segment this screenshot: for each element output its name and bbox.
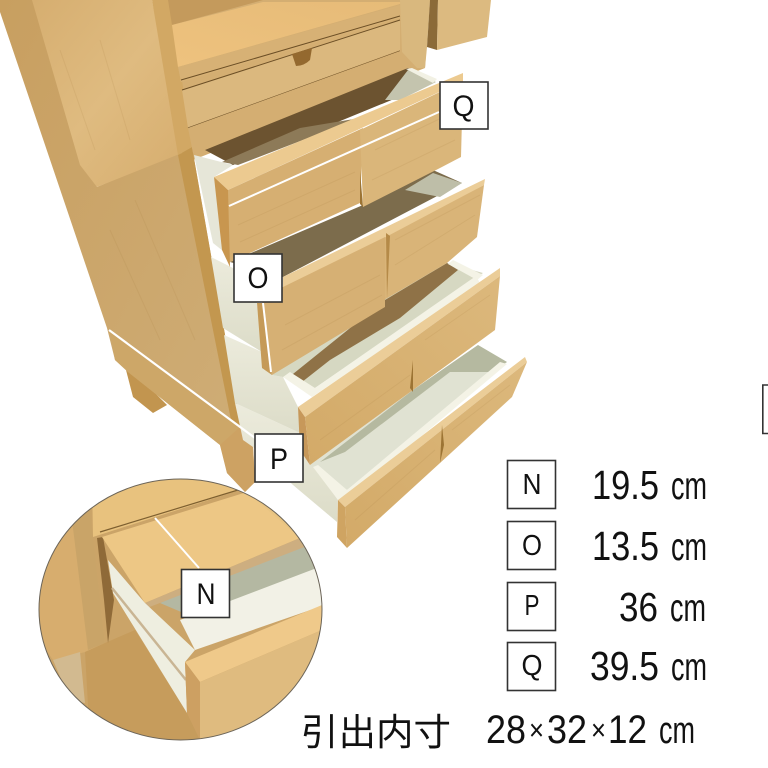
cropped box at right edge [763, 385, 768, 434]
small drawer [182, 20, 400, 128]
cabinet body [0, 0, 491, 492]
drawer: O [211, 170, 485, 375]
drawer: P [224, 260, 500, 465]
back leg [126, 370, 167, 413]
marker P: P [270, 443, 288, 476]
measurement line P [109, 330, 255, 438]
drawer inner dimensions: × [591, 714, 606, 747]
right front [384, 185, 484, 300]
drawer inner dimensions: × [529, 714, 544, 747]
centre split [440, 425, 444, 463]
white drawer side [108, 560, 195, 713]
dark gap [97, 537, 114, 643]
interior shadow [160, 547, 314, 612]
interior shadow [320, 345, 507, 462]
legend row N: cm [671, 465, 707, 508]
front leg [220, 427, 255, 492]
legend row Q: Q [522, 650, 542, 682]
legend row P: 36 [619, 584, 658, 630]
interior floor [180, 566, 322, 650]
split [386, 233, 390, 298]
side [194, 155, 233, 255]
interior [272, 263, 483, 390]
drawer: bottom [235, 345, 527, 548]
legend row P: P [524, 590, 540, 622]
white side groove [112, 588, 186, 680]
legend [508, 460, 707, 690]
left stile [40, 526, 94, 660]
front face [200, 630, 322, 740]
front top [283, 179, 485, 290]
legend row N: 19.5 [592, 462, 659, 508]
wood grain [60, 40, 510, 520]
interior back [385, 70, 436, 100]
back rim [448, 260, 483, 280]
drawer inner dimensions: 引出内寸 [301, 712, 451, 753]
measurement line O [263, 303, 271, 372]
front face [305, 276, 500, 465]
top plate [102, 492, 300, 603]
top plate edge [145, 538, 307, 608]
legend row P: cm [670, 587, 706, 630]
front end [337, 500, 347, 548]
interior [310, 345, 507, 490]
split [360, 170, 363, 207]
drawer inner dimensions: cm [659, 710, 695, 752]
marker N [182, 570, 230, 618]
legend row P [508, 582, 706, 630]
interior shadow [288, 263, 458, 382]
legend row Q [508, 642, 707, 690]
legend row O: O [522, 530, 542, 562]
marker Q [440, 82, 488, 129]
side [211, 257, 262, 352]
front top [338, 357, 527, 507]
top shelf [172, 2, 407, 67]
interior floor [222, 118, 360, 165]
centre column [400, 0, 430, 68]
right column block [437, 0, 491, 50]
front top [214, 73, 463, 190]
top strip [168, 0, 263, 25]
front face [345, 362, 527, 548]
rim [283, 276, 480, 397]
front end [298, 407, 310, 465]
side [235, 403, 338, 522]
marker P [255, 434, 303, 482]
back rim [406, 68, 437, 83]
interior [230, 170, 462, 277]
side stile [178, 147, 245, 440]
drawer inner dimensions [301, 708, 695, 753]
upper background [92, 479, 240, 537]
front top [298, 268, 500, 417]
front backing [168, 0, 430, 160]
front end [185, 662, 200, 712]
legend row N [508, 460, 707, 508]
interior [205, 68, 433, 165]
legend row N: N [522, 469, 542, 501]
end grain [257, 303, 272, 375]
drawer back fill [256, 500, 294, 533]
drawer: Q [194, 68, 463, 267]
drawer inner dimensions: 32 [547, 708, 587, 752]
marker O [234, 254, 282, 302]
left front [228, 128, 363, 263]
left stile strip [72, 510, 105, 650]
handle notch [292, 48, 312, 66]
lower left pale patch [53, 652, 85, 703]
measurement line Q [229, 112, 439, 206]
small drawer outline [181, 16, 400, 128]
marker Q: Q [452, 90, 474, 123]
measurement line N [155, 518, 199, 568]
column gap [427, 0, 438, 50]
lower drawer face [85, 630, 200, 740]
rim [313, 362, 507, 500]
top rail line [100, 490, 238, 532]
end grain [214, 177, 230, 267]
split [410, 360, 413, 392]
legend row Q: cm [671, 646, 707, 689]
circle outline [39, 479, 322, 740]
upper side block [32, 0, 182, 187]
legend row O [508, 522, 707, 570]
rail above drawers [188, 51, 417, 153]
base wood [39, 479, 322, 740]
right front [360, 81, 463, 207]
legend row O: cm [671, 526, 707, 569]
drawer inner dimensions: 28 [486, 708, 526, 752]
legend row Q: 39.5 [590, 643, 659, 689]
interior back [405, 173, 462, 197]
marker O: O [248, 262, 268, 295]
left front [262, 237, 385, 375]
upper front stile [152, 0, 192, 155]
plinth rail [110, 330, 253, 447]
detail circle [39, 479, 322, 740]
marker N: N [196, 578, 216, 611]
front top [185, 605, 322, 682]
drawer inner dimensions: 12 [608, 708, 647, 752]
rail under shelf [178, 3, 407, 82]
side [224, 335, 300, 433]
lower side panel [0, 0, 255, 492]
legend row O: 13.5 [592, 523, 659, 569]
